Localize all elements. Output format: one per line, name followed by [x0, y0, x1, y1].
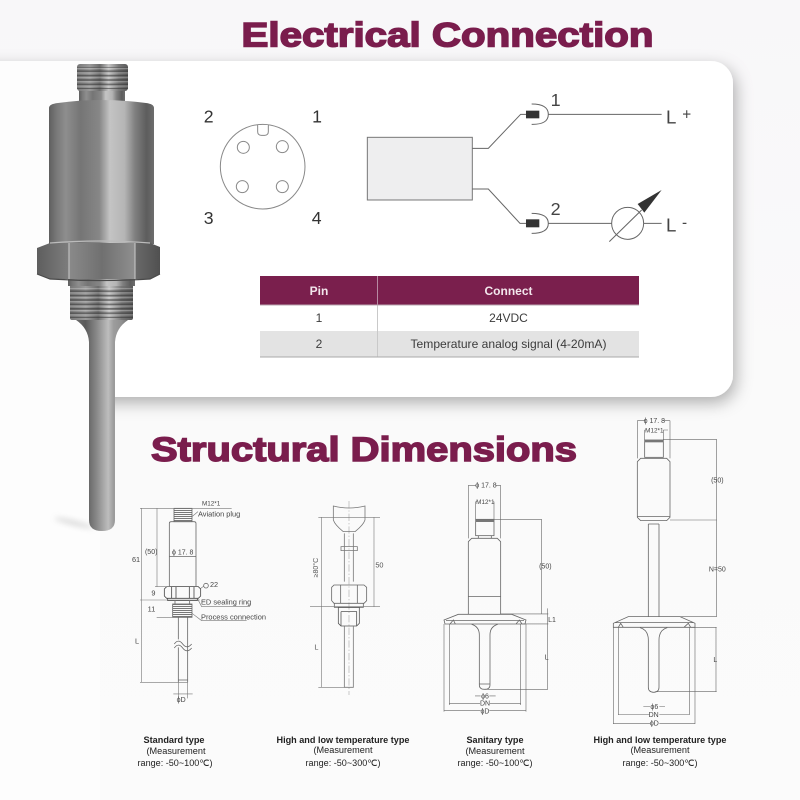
dimension labels	[644, 418, 726, 728]
drawing: sanitary type	[444, 483, 556, 715]
pin holes	[236, 141, 288, 193]
dimension labels: DN	[480, 701, 490, 708]
wiring schematic	[367, 90, 691, 242]
pin numbers: 2	[204, 107, 214, 127]
dimension labels: Process connection	[201, 612, 266, 621]
table text: Pin	[310, 284, 328, 298]
probe	[344, 626, 353, 687]
dimension labels: ϕD	[177, 697, 186, 704]
neck	[341, 533, 357, 582]
hex nut	[37, 241, 160, 280]
dimension labels: M12*1	[476, 499, 495, 506]
stem	[648, 524, 659, 617]
wire 1	[472, 114, 662, 148]
dimension labels: (50)	[711, 477, 724, 484]
caption: high and low temperature type: (Measurement	[314, 745, 373, 755]
drawing: high and low temperature type	[310, 501, 383, 695]
table text: Connect	[484, 284, 533, 298]
dimension labels: ϕ6	[481, 693, 489, 700]
connector outline	[220, 124, 305, 209]
title: Structural Dimensions: Structural Dimensions	[151, 431, 577, 469]
process thread	[338, 607, 359, 626]
dimension labels: L	[713, 657, 717, 664]
caption: standard type: Standard type	[144, 735, 204, 745]
dimension labels: ≥80°C	[312, 558, 320, 577]
caption: high and low temperature type: High and low temperature type	[276, 735, 410, 745]
dimension lines	[613, 421, 717, 724]
table text: 2	[316, 337, 323, 351]
panel: electrical connection	[0, 61, 733, 397]
dimension labels: L	[314, 642, 318, 651]
table rows	[260, 306, 639, 358]
dimension labels: ϕ6	[650, 704, 658, 711]
dimension labels: 9	[151, 588, 155, 597]
cylinder body	[49, 100, 154, 244]
dimension labels: ED sealing ring	[201, 597, 251, 606]
connector pinout diagram	[204, 107, 322, 228]
dimension labels: ϕ 17. 8	[644, 418, 665, 425]
caption: high and low temperature type	[276, 735, 410, 768]
clamp flange	[613, 617, 695, 627]
dimension labels	[475, 483, 556, 715]
probe shadow	[54, 516, 94, 530]
drawing: standard type	[132, 501, 266, 704]
terminal 2	[526, 213, 548, 233]
probe	[640, 628, 667, 692]
dimension labels	[312, 558, 383, 651]
dimension labels: Aviation plug	[198, 509, 240, 518]
process thread	[173, 601, 192, 617]
leader lines	[192, 512, 250, 621]
pin table	[260, 276, 639, 358]
hex	[164, 587, 201, 601]
table text	[310, 284, 607, 351]
dimension labels: 61	[132, 555, 140, 564]
body	[637, 458, 670, 521]
body	[169, 522, 196, 586]
caption: sanitary type: Sanitary type	[466, 735, 524, 745]
probe rod	[76, 320, 128, 531]
clamp flange	[444, 614, 526, 624]
probe	[174, 617, 192, 682]
title: Electrical Connection: Electrical Connection	[242, 17, 654, 55]
dimension labels: M12*1	[645, 427, 664, 434]
pin numbers: 1	[312, 107, 322, 127]
wire 2	[472, 189, 662, 223]
table text: Temperature analog signal (4-20mA)	[410, 337, 607, 351]
hex	[332, 585, 367, 607]
dimension labels: L1	[548, 617, 556, 624]
dimension labels: 22	[210, 580, 218, 589]
dimension labels: L	[135, 636, 139, 645]
caption: high and low temperature type, sanitary: range: -50~300℃)	[622, 758, 698, 768]
heat sink head	[333, 506, 365, 532]
dimension labels: 11	[148, 604, 155, 613]
table text: 1	[316, 311, 323, 325]
process thread	[68, 276, 135, 320]
drawing: high and low temperature sanitary type	[613, 418, 726, 728]
top thread	[77, 64, 128, 102]
dimension labels: (50)	[145, 549, 157, 556]
schematic labels: L	[666, 106, 676, 127]
caption: sanitary type: (Measurement	[466, 746, 525, 756]
caption: high and low temperature type: range: -50~300℃)	[306, 758, 381, 768]
schematic labels: 2	[551, 199, 561, 219]
caption: standard type: range: -50~100℃)	[138, 758, 213, 768]
dimension labels: 50	[375, 560, 383, 569]
schematic labels: -	[682, 214, 687, 231]
sensor product image	[37, 64, 160, 531]
pin numbers: 4	[312, 208, 322, 228]
caption: high and low temperature type, sanitary	[594, 735, 726, 768]
thread	[476, 519, 494, 538]
dimension labels: N=50	[709, 567, 726, 574]
probe	[472, 624, 498, 689]
dimension lines	[310, 517, 380, 687]
connector key notch	[258, 125, 268, 135]
table text: 24VDC	[489, 311, 528, 325]
table header	[260, 276, 639, 304]
schematic labels: +	[682, 106, 691, 123]
pin numbers: 3	[204, 208, 214, 228]
caption: sanitary type	[458, 735, 533, 768]
dimension labels	[132, 501, 266, 704]
dimension labels: ϕD	[481, 708, 489, 715]
caption: standard type	[138, 735, 213, 768]
dimension lines	[140, 508, 232, 698]
left background strip behind sensor	[0, 61, 100, 800]
dimension labels: DN	[649, 712, 659, 719]
dimension labels: (50)	[539, 564, 552, 571]
body	[468, 538, 501, 614]
schematic labels: 1	[551, 90, 561, 110]
schematic labels: L	[666, 215, 676, 236]
dimension lines	[444, 485, 548, 712]
dimension labels: ϕD	[650, 721, 659, 728]
pin numbers	[204, 107, 322, 228]
schematic labels	[551, 90, 691, 236]
caption: standard type: (Measurement	[146, 746, 206, 756]
dimension labels: ϕ 17. 8	[475, 483, 497, 490]
plug thread	[174, 508, 192, 522]
dimension labels: L	[545, 654, 549, 661]
dimension labels: M12*1	[202, 501, 221, 508]
ammeter symbol	[609, 190, 662, 242]
terminal 1	[526, 104, 548, 124]
caption: high and low temperature type, sanitary: (Measurement	[630, 745, 690, 755]
sensor box	[367, 137, 472, 200]
centre line	[348, 501, 350, 695]
dimension labels: ϕ 17. 8	[172, 549, 193, 556]
caption: sanitary type: range: -50~100℃)	[458, 758, 533, 768]
thread	[645, 440, 663, 457]
caption: high and low temperature type, sanitary: High and low temperature type	[594, 735, 726, 745]
